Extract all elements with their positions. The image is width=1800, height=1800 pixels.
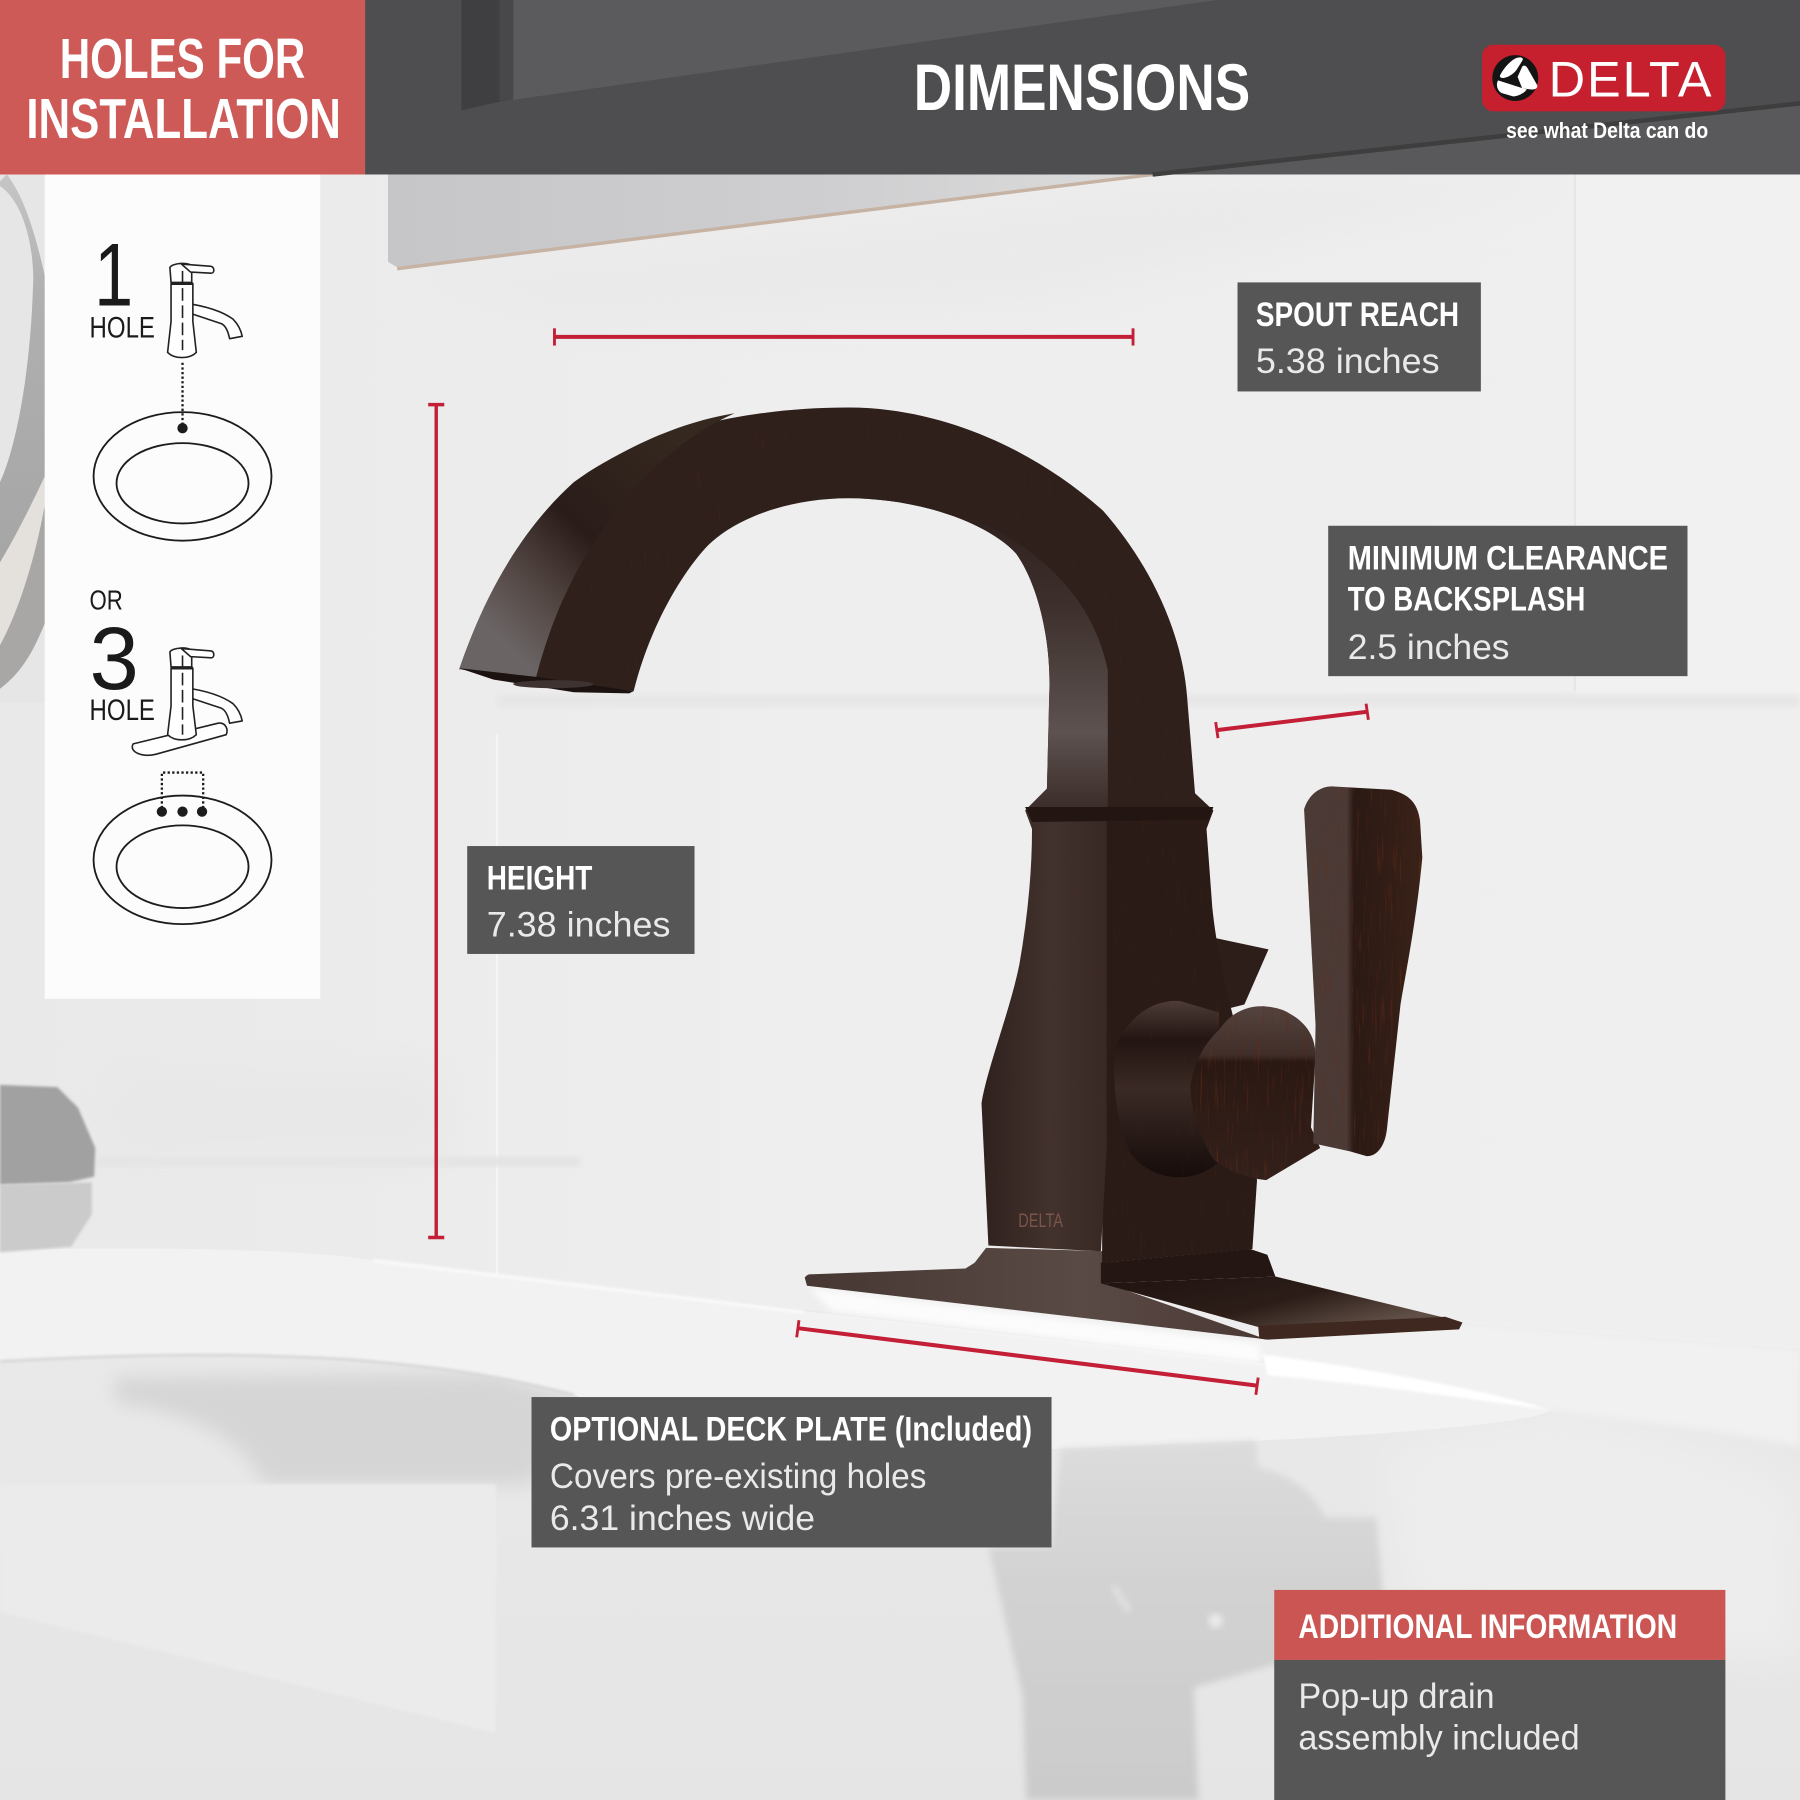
blurred object at left [0,1085,95,1185]
handle hub [1114,1001,1219,1177]
icon: three hole faucet with plate [132,648,242,755]
callout: spout reach [1238,282,1481,391]
panel: additional information: ADDITIONAL INFORMATION [1298,1608,1677,1646]
callout: optional deck plate: 6.31 inches wide [550,1498,815,1538]
mirror ring at left edge [0,174,45,703]
handle cap [1190,1006,1320,1180]
callout: height: HEIGHT [487,860,592,898]
callout: spout reach: SPOUT REACH [1256,296,1459,334]
callout: minimum clearance [1328,526,1688,676]
spout aerator [459,668,634,693]
callout: height: 7.38 inches [487,905,670,945]
icon: Delta emblem [1492,55,1538,101]
sink basin [0,1250,1800,1800]
or label: OR [90,585,123,616]
header bar [365,0,1800,174]
three hole label: 3 [90,608,139,708]
icon: single hole sink [94,363,271,541]
one hole label: 1 [94,224,133,324]
callout: optional deck plate: OPTIONAL DECK PLATE (Included) [550,1411,1032,1449]
faucet body right face [1102,804,1257,1263]
mirror shadow [396,174,1584,333]
collar flange [1025,807,1213,822]
icon: three hole sink [94,773,271,924]
one hole label [90,224,155,344]
arrow: clearance dimension line [1216,704,1368,738]
faucet body left face [982,810,1107,1251]
logo: Delta [1482,45,1725,143]
tagline: see what Delta can do [1506,118,1708,143]
faucet [459,408,1462,1340]
spout main face [459,408,1213,810]
panel: additional information: assembly included [1298,1717,1580,1757]
heading: dimensions: DIMENSIONS [914,51,1250,124]
callout: optional deck plate: Covers pre-existing holes [550,1456,926,1496]
spout [459,408,1213,810]
callout: height [467,846,695,954]
faucet reflection in basin [988,1441,1382,1800]
panel: additional information [1274,1590,1725,1800]
callout: optional deck plate [532,1397,1052,1547]
DELTA mark on body: DELTA [1018,1210,1063,1232]
icon: single hole faucet [168,263,242,358]
callout: spout reach: 5.38 inches [1256,341,1440,381]
callout: minimum clearance: TO BACKSPLASH [1348,581,1585,619]
heading: holes for installation: INSTALLATION [26,87,341,150]
deck plate [805,1248,1462,1340]
spout tip side face [459,413,735,677]
logo wordmark: DELTA [1549,50,1712,107]
three hole label [90,608,155,727]
callout: minimum clearance: 2.5 inches [1348,627,1510,667]
panel: additional information: Pop-up drain [1298,1676,1495,1716]
arrow: deck plate dimension line [797,1320,1258,1395]
arrow: spout reach dimension line [554,328,1133,346]
callout: minimum clearance: MINIMUM CLEARANCE [1348,539,1668,577]
handle lever [1304,786,1422,1156]
spout inner shaded face [848,498,1108,810]
heading: holes for installation [0,0,365,174]
three hole label: HOLE [90,694,155,727]
one hole label: HOLE [90,311,155,344]
panel: holes for installation [0,0,365,999]
heading: holes for installation: HOLES FOR [60,27,305,90]
countertop [0,1248,1551,1451]
arrow: height dimension line [428,404,444,1237]
back pop-up knob [1215,938,1268,1010]
